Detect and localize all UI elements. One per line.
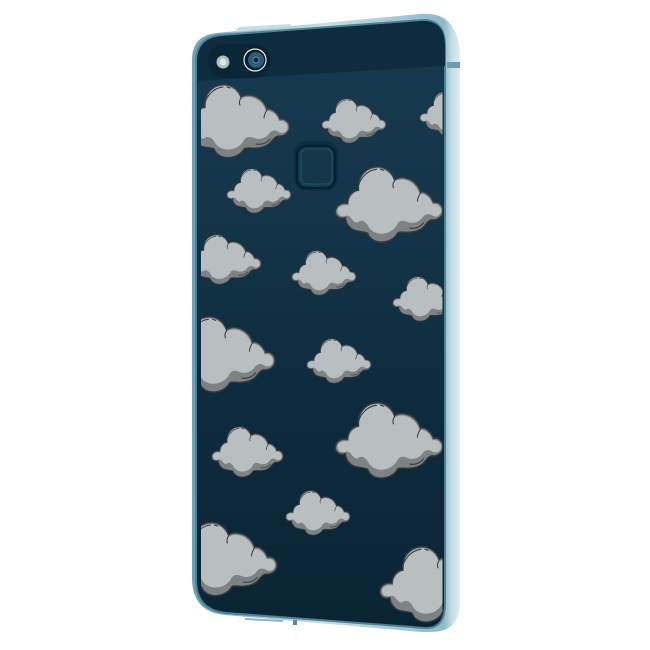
- cloud 9: [201, 316, 276, 393]
- phone case illustration: [192, 14, 460, 632]
- cloud 15: [379, 546, 442, 623]
- cloud 11: [335, 403, 443, 478]
- cloud 7: [292, 251, 356, 295]
- cloud pattern: [201, 84, 442, 623]
- phone back panel: [196, 20, 445, 628]
- fingerprint sensor: [294, 141, 338, 191]
- cloud 6: [201, 234, 262, 285]
- icon: camera lens: [243, 47, 269, 73]
- cloud 1: [201, 84, 290, 158]
- transparent bumper case: [192, 14, 460, 632]
- camera module: [208, 44, 270, 78]
- cloud 3: [419, 92, 442, 136]
- cloud 12: [212, 427, 283, 477]
- cloud 5: [335, 167, 443, 242]
- cloud 13: [286, 491, 350, 535]
- icon: flash: [216, 56, 230, 68]
- cloud 10: [307, 339, 371, 383]
- cloud 14: [201, 522, 278, 596]
- cloud 8: [392, 276, 442, 322]
- cloud 2: [322, 99, 386, 143]
- cloud 4: [227, 169, 291, 213]
